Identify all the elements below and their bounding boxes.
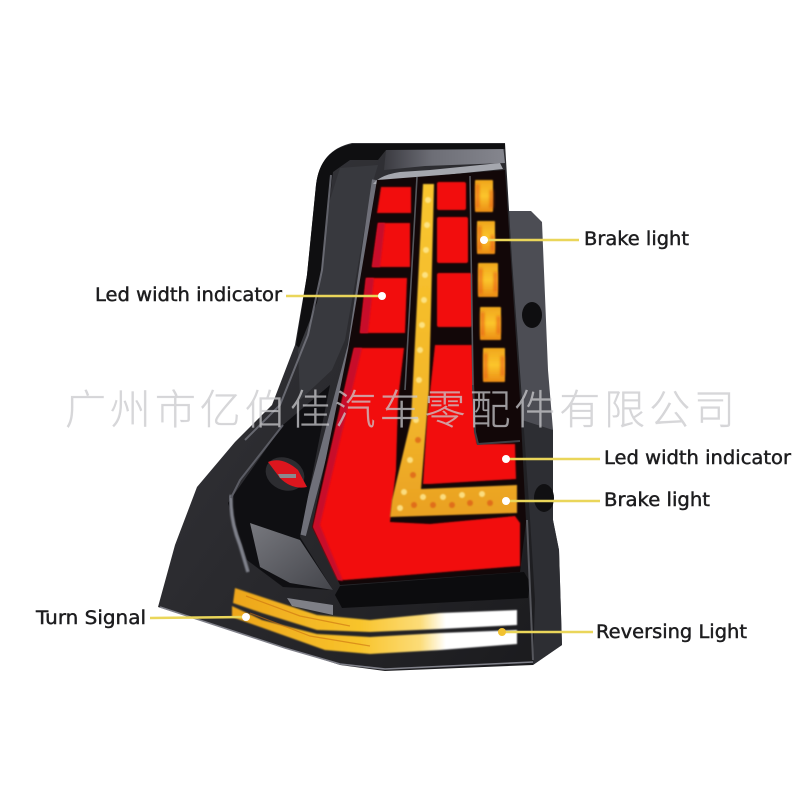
lower mounting notch [534, 484, 554, 512]
callout: reversing light: Reversing Light [596, 622, 747, 643]
callout: turn signal: Turn Signal [35, 608, 146, 629]
darker left strip [313, 223, 385, 581]
small grey bezel [287, 598, 333, 615]
callout: LED width indicator (right) [502, 448, 791, 469]
column separators [405, 176, 473, 390]
callout: brake light (top): Brake light [584, 229, 689, 250]
callout: turn signal [35, 608, 250, 629]
curved chrome trim [231, 495, 248, 572]
lower inner trim [228, 385, 333, 590]
dark frame around amber column [473, 385, 520, 444]
callout: brake light (lower): Brake light [604, 490, 710, 511]
bottom housing trim [160, 607, 533, 669]
red side reflector [260, 451, 310, 497]
callout: LED width indicator (left): Led width indicator [95, 285, 282, 306]
amber inner speckle [476, 184, 504, 379]
mounting hole [522, 302, 542, 328]
lamp housing [158, 143, 535, 671]
lens dark background [312, 170, 526, 585]
turn signal and reversing light bands [232, 588, 517, 654]
red brake panels: left column [313, 187, 520, 580]
amber brake segments [475, 180, 505, 382]
top-left black gloss [296, 144, 505, 350]
lower lens bezel [335, 572, 530, 608]
callout: brake light (top) [480, 229, 689, 250]
mounting bracket and side housing [505, 211, 562, 665]
tail lamp illustration [158, 143, 562, 671]
top glossy bevel [384, 145, 505, 170]
inner grey panel [250, 523, 333, 590]
callout: reversing light [498, 622, 747, 643]
amber L-shaped turn strip [390, 184, 517, 517]
callout: LED width indicator (left) [95, 285, 386, 306]
L strip LED dots [397, 197, 485, 511]
watermark: 广州市亿伯佳汽车零配件有限公司 [65, 376, 735, 436]
callout: LED width indicator (right): Led width indicator [604, 448, 791, 469]
left inner panel [298, 165, 378, 400]
top silver trim [373, 163, 503, 184]
red brake panels: centre column [423, 182, 516, 484]
callout: brake light (lower) [502, 490, 710, 511]
